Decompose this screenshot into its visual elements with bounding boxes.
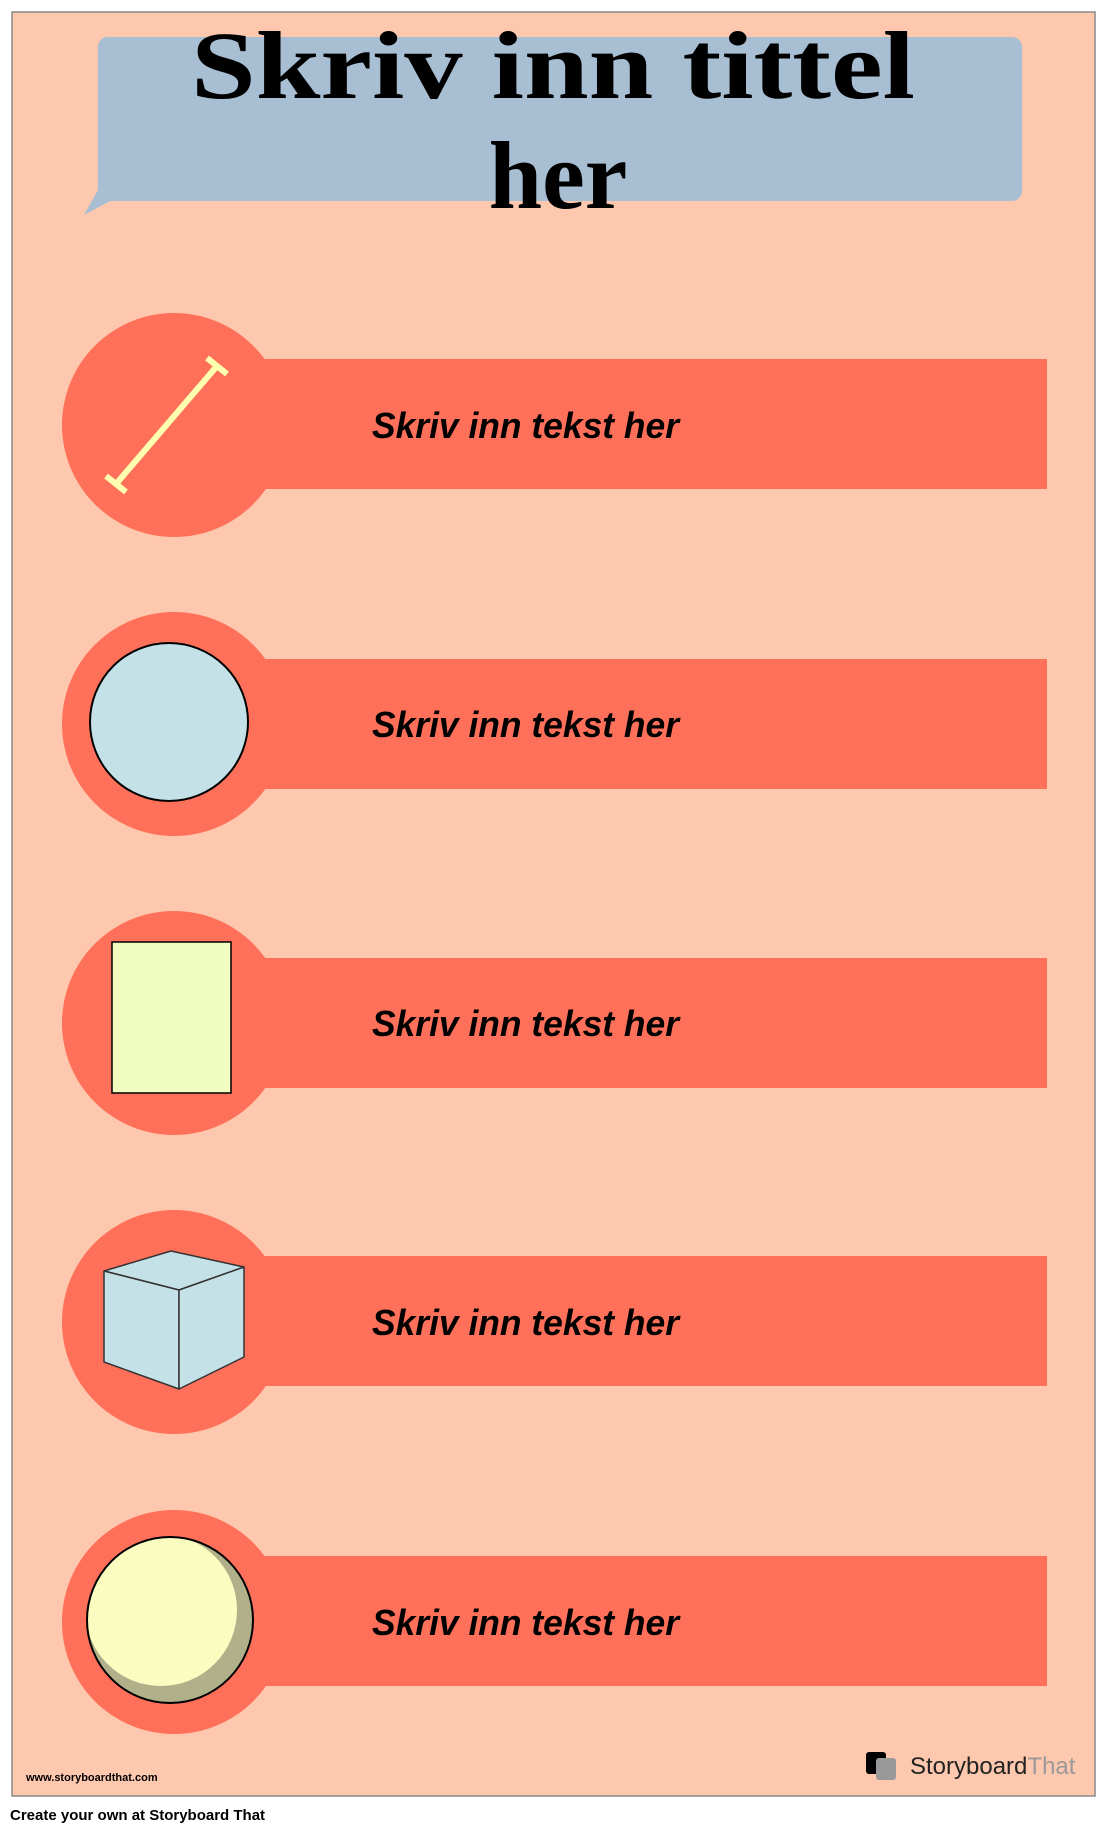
row 3: Skriv inn tekst her — [372, 1003, 681, 1044]
icon: rectangle — [112, 942, 231, 1093]
icon: circle — [90, 643, 248, 801]
row 1: Skriv inn tekst her — [372, 405, 681, 446]
row 5: Skriv inn tekst her — [372, 1602, 681, 1643]
logo: StoryboardThat — [910, 1753, 1076, 1780]
title box: her — [489, 122, 627, 229]
credit: Create your own at Storyboard That — [10, 1807, 265, 1824]
row 4: Skriv inn tekst her — [372, 1302, 681, 1343]
icon: cube — [104, 1251, 244, 1389]
row 4 — [62, 1210, 1047, 1434]
row 2: Skriv inn tekst her — [372, 704, 681, 745]
row 3 — [62, 911, 1047, 1135]
icon: line segment — [106, 358, 227, 492]
footer url: www.storyboardthat.com — [25, 1772, 158, 1784]
title box: Skriv inn tittel — [191, 12, 915, 119]
row 2 — [62, 612, 1047, 836]
row 1 — [62, 313, 1047, 537]
icon: sphere — [85, 1534, 253, 1703]
row 5 — [62, 1510, 1047, 1734]
title box — [84, 12, 1022, 229]
